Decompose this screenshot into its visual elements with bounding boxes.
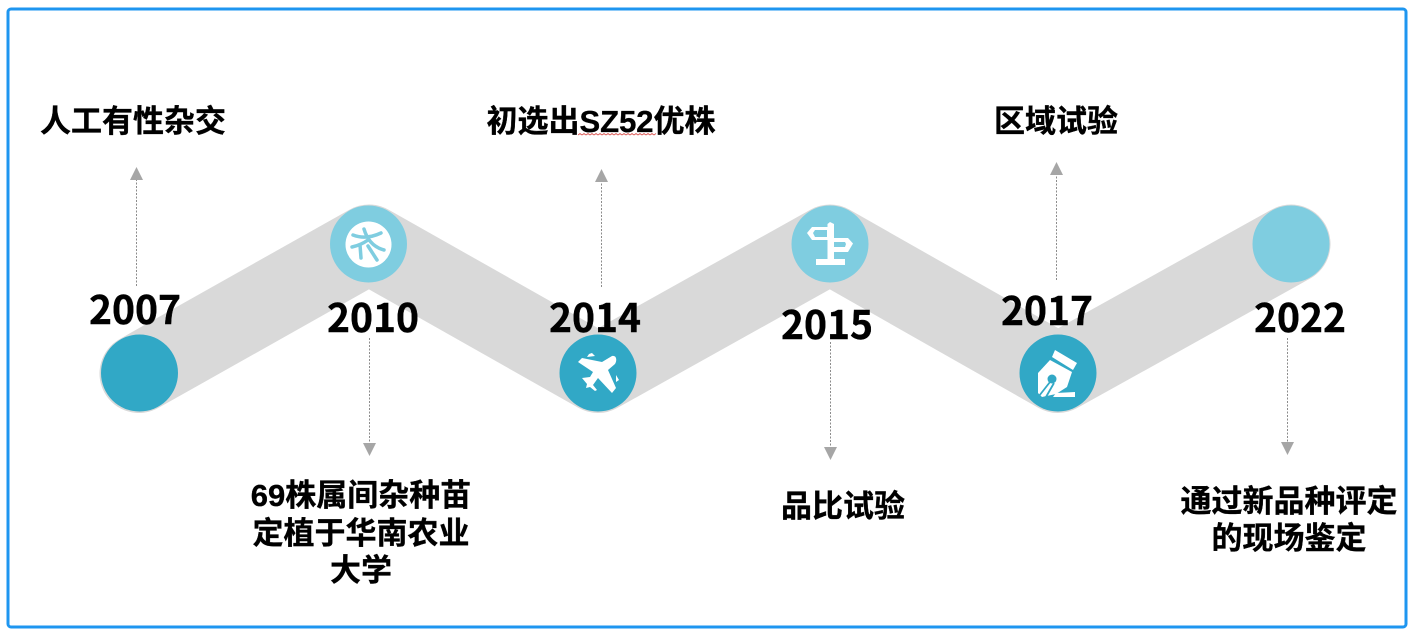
label 2015: 品比试验	[781, 489, 905, 524]
node 2010 with basketball icon	[330, 206, 407, 282]
node 2017 with pen nib icon	[1020, 334, 1096, 412]
year 2007: 2007	[89, 280, 181, 336]
arrow down 2015	[824, 342, 837, 460]
label 2014: 初选出SZ52优株	[486, 104, 716, 139]
node 2022	[1252, 206, 1330, 282]
year 2022: 2022	[1254, 288, 1346, 344]
arrow up 2014	[595, 169, 608, 287]
label 2007: 人工有性杂交	[40, 104, 226, 139]
node 2007	[101, 334, 178, 412]
year 2015: 2015	[781, 295, 873, 351]
zigzag band	[139, 244, 1291, 374]
spelling underline	[578, 134, 656, 135]
node 2014 with airplane icon	[560, 334, 636, 412]
label 2010: 定植于华南农业	[252, 516, 470, 551]
node 2015 with signpost icon	[792, 206, 868, 282]
year 2017: 2017	[1001, 281, 1093, 337]
label 2017: 区域试验	[994, 104, 1118, 139]
arrow up 2007	[130, 167, 143, 286]
year 2010: 2010	[327, 288, 419, 344]
label 2022: 的现场鉴定	[1212, 521, 1366, 556]
arrow down 2010	[363, 338, 376, 456]
label 2022: 通过新品种评定	[1180, 484, 1398, 519]
label 2010: 69株属间杂种苗	[251, 478, 471, 513]
arrow down 2022	[1281, 338, 1294, 455]
label 2010: 大学	[330, 553, 392, 588]
year 2014: 2014	[549, 288, 641, 344]
arrow up 2017	[1050, 162, 1063, 280]
